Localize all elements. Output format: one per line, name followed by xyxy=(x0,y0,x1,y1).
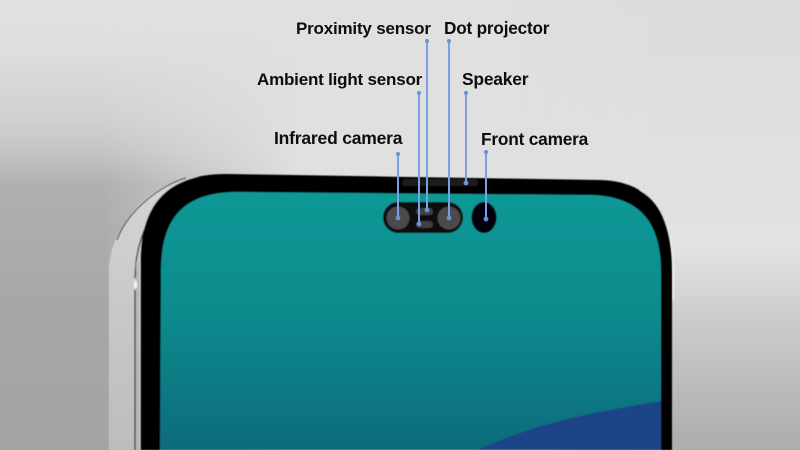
phone silver side frame xyxy=(109,175,230,450)
notch pill xyxy=(383,202,463,233)
phone right edge highlight xyxy=(640,190,674,300)
background wall xyxy=(0,93,800,450)
ambient light sensor xyxy=(416,221,433,228)
phone side highlight xyxy=(136,262,139,450)
label: Dot projector: Dot projector xyxy=(444,18,550,38)
line: infrared camera xyxy=(396,152,400,220)
line: speaker xyxy=(464,91,468,185)
label: Infrared camera: Infrared camera xyxy=(274,128,403,148)
phone screen xyxy=(160,192,661,450)
dot projector lens xyxy=(438,206,460,230)
proximity sensor xyxy=(416,208,433,215)
line: proximity sensor xyxy=(425,39,429,212)
phone side glint xyxy=(134,281,137,288)
label: Front camera: Front camera xyxy=(481,129,589,149)
phone side edge strip xyxy=(135,206,158,450)
line: front camera xyxy=(484,150,488,221)
label: Ambient light sensor: Ambient light sensor xyxy=(257,70,423,89)
front camera cutout xyxy=(472,202,496,233)
line: dot projector xyxy=(447,39,451,220)
callout lines xyxy=(396,39,488,226)
label: Proximity sensor: Proximity sensor xyxy=(296,19,431,38)
label: Speaker: Speaker xyxy=(462,69,529,89)
line: ambient light sensor xyxy=(417,91,421,226)
phone body xyxy=(109,174,674,450)
phone side antenna line xyxy=(117,178,186,240)
screen blue wave xyxy=(478,401,662,450)
phone black bezel xyxy=(140,174,672,450)
infrared camera lens xyxy=(386,206,410,230)
earpiece speaker grille xyxy=(402,179,478,186)
